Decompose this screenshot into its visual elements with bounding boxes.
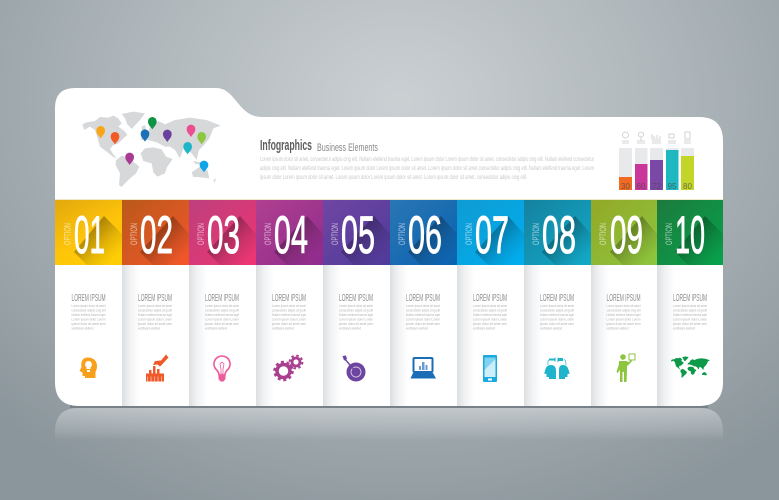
text block 02: Nullam eleifend trauma eget — [138, 312, 173, 317]
text block 09: Lorem ipsum dolor Lorem — [606, 316, 641, 322]
text block 04: Lorem ipsum dolor Lorem — [272, 316, 306, 322]
text block 09: Lorem ipsum dolor sit amet — [606, 303, 641, 308]
text block 01: ipsum dolor sit amet sem — [72, 321, 106, 326]
text block 10: Lorem ipsum dolor Lorem — [673, 316, 707, 322]
text block 08 — [540, 293, 575, 330]
option 09 tile — [591, 200, 657, 265]
text block 09 — [606, 293, 641, 330]
panel folds — [122, 265, 675, 406]
option 01 tile: 01 — [74, 206, 105, 265]
option 03 tile — [189, 200, 256, 265]
text block 05: ipsum dolor sit amet sem — [339, 321, 374, 326]
text block 06: ipsum dolor sit amet sem — [406, 321, 441, 326]
option 06 tile — [390, 200, 457, 265]
bar chart — [619, 132, 694, 191]
text block 05: Lorem ipsum dolor sit amet — [339, 303, 374, 308]
text block 10: consectetur adipis cing elit — [673, 308, 708, 312]
text block 07: consectetur adipis cing elit — [473, 308, 508, 312]
text block 06: Lorem ipsum dolor sit amet — [406, 303, 441, 308]
intro paragraph: ipsum dolor Lorem ipsum dolor sit amet. Lorem ipsum dolor Lorem ipsum dolor sit amet. Lorem ipsum dolor sit amet, consectetur adipis cing elit. — [260, 174, 527, 181]
text block 07: ipsum dolor sit amet sem — [473, 321, 508, 326]
text: LOREM IPSUM — [473, 293, 507, 304]
text block 02 — [138, 293, 173, 330]
ribbon top edge — [55, 199, 723, 200]
icon: light bulb — [214, 356, 230, 382]
text block 03: ipsum dolor sit amet sem — [205, 321, 240, 326]
option 02 tile: OPTION — [129, 223, 140, 245]
text block 07: Lorem ipsum dolor sit amet — [473, 303, 508, 308]
text block 09: Nullam eleifend trauma eget — [606, 312, 641, 317]
option 08 tile — [524, 200, 591, 265]
text block 09: vestibulum eleifend — [606, 326, 628, 330]
option 10 tile: 10 — [675, 206, 705, 265]
icon: green world map — [671, 357, 710, 378]
text block 10: vestibulum eleifend — [673, 326, 695, 330]
text block 02: vestibulum eleifend — [138, 326, 160, 330]
text block 04: Lorem ipsum dolor sit amet — [272, 303, 307, 308]
text block 03: Lorem ipsum dolor Lorem — [205, 316, 239, 322]
option 03 tile: OPTION — [196, 223, 207, 245]
option 01 tile: OPTION — [62, 223, 74, 245]
text block 01: vestibulum eleifend — [72, 326, 94, 330]
intro paragraph — [260, 156, 594, 181]
text block 02: consectetur adipis cing elit — [138, 308, 173, 312]
text block 05: Nullam eleifend trauma eget — [339, 312, 374, 317]
text block 07 — [473, 293, 508, 330]
option 01 tile — [55, 200, 122, 265]
option 02 tile — [122, 200, 189, 265]
text block 09: ipsum dolor sit amet sem — [606, 321, 641, 326]
text block 06: Nullam eleifend trauma eget — [406, 312, 441, 317]
option 08 tile: 08 — [542, 206, 576, 265]
text block 10: Nullam eleifend trauma eget — [673, 312, 708, 317]
folder card — [55, 88, 723, 406]
text block 07: Lorem ipsum dolor Lorem — [473, 316, 507, 322]
text block 06: vestibulum eleifend — [406, 326, 428, 330]
option 04 tile — [256, 200, 323, 265]
text block 04: consectetur adipis cing elit — [272, 308, 307, 312]
text block 09: consectetur adipis cing elit — [606, 308, 641, 312]
text block 04: Nullam eleifend trauma eget — [272, 312, 307, 317]
text: LOREM IPSUM — [540, 293, 574, 304]
map pins — [96, 117, 208, 172]
text block 06: consectetur adipis cing elit — [406, 308, 441, 312]
text block 03: consectetur adipis cing elit — [205, 308, 240, 312]
text: LOREM IPSUM — [406, 293, 440, 304]
option 06 tile: 06 — [408, 206, 442, 265]
text block 08: Nullam eleifend trauma eget — [540, 312, 575, 317]
text block 10: Lorem ipsum dolor sit amet — [673, 303, 708, 308]
text block 01: Lorem ipsum dolor sit amet — [72, 303, 106, 308]
icon: two heads connected — [544, 357, 570, 379]
option 05 tile — [323, 200, 390, 265]
text block 02: Lorem ipsum dolor Lorem — [138, 316, 172, 322]
option 09 tile: 09 — [610, 206, 643, 265]
text: LOREM IPSUM — [138, 293, 172, 304]
text block 07: Nullam eleifend trauma eget — [473, 312, 508, 317]
card reflection — [55, 408, 723, 440]
text block 08: consectetur adipis cing elit — [540, 308, 575, 312]
text block 03: Nullam eleifend trauma eget — [205, 312, 240, 317]
text: LOREM IPSUM — [606, 293, 640, 304]
text: LOREM IPSUM — [72, 293, 106, 304]
text block 05: consectetur adipis cing elit — [339, 308, 374, 312]
icon: person with tablet — [616, 354, 635, 382]
icon: dartboard target — [342, 356, 366, 382]
world map with pins — [82, 112, 221, 187]
text block 08: Lorem ipsum dolor sit amet — [540, 303, 575, 308]
heading: Business Elements — [317, 142, 378, 154]
text: LOREM IPSUM — [205, 293, 239, 304]
text block 08: Lorem ipsum dolor Lorem — [540, 316, 574, 322]
icon: gears — [274, 356, 302, 380]
bar values: 72 — [652, 182, 661, 191]
option 04 tile: 04 — [274, 206, 308, 265]
option 04 tile: OPTION — [263, 223, 274, 245]
bar values: 95 — [668, 182, 677, 191]
option 02 tile: 02 — [140, 206, 173, 265]
icon: hand over bar chart — [146, 354, 168, 382]
text block 03: vestibulum eleifend — [205, 326, 227, 330]
text block 02: ipsum dolor sit amet sem — [138, 321, 173, 326]
icon: head with lightbulb — [80, 358, 97, 378]
icon: smartphone — [483, 355, 497, 382]
text: LOREM IPSUM — [272, 293, 306, 304]
card drop shadow — [70, 404, 708, 408]
text block 01: consectetur adipis cing elit — [72, 308, 106, 312]
text block 03: Lorem ipsum dolor sit amet — [205, 303, 240, 308]
bar fills — [619, 150, 694, 190]
world map — [82, 112, 221, 187]
option 10 tile — [657, 200, 723, 265]
bar values: 80 — [683, 182, 692, 191]
text block 05 — [339, 293, 374, 330]
option 03 tile: 03 — [207, 206, 240, 265]
intro paragraph: Lorem ipsum dolor sit amet, consectetur adipis cing elit. Nullam eleifend trauma eget. Lorem ipsum dolor Lorem ipsum dolor sit amet, consectetur adipis cing elit. Nullam eleifend consectetur — [260, 156, 594, 163]
text block 06 — [406, 293, 441, 330]
text block 08: vestibulum eleifend — [540, 326, 562, 330]
bar values: 30 — [621, 182, 630, 191]
option 10 tile: OPTION — [664, 223, 675, 245]
option 07 tile: OPTION — [464, 223, 475, 245]
text block 01: Lorem ipsum dolor Lorem — [72, 316, 106, 322]
text block 03 — [205, 293, 240, 330]
bar chart icons — [622, 132, 691, 143]
text block 02: Lorem ipsum dolor sit amet — [138, 303, 173, 308]
text: LOREM IPSUM — [339, 293, 373, 304]
option 07 tile — [457, 200, 524, 265]
bar values — [621, 182, 692, 191]
text block 10: ipsum dolor sit amet sem — [673, 321, 708, 326]
icon: laptop with chart — [410, 358, 436, 378]
option 05 tile: OPTION — [330, 223, 341, 245]
bar tracks — [619, 148, 694, 190]
option 06 tile: OPTION — [397, 223, 408, 245]
option 05 tile: 05 — [341, 206, 375, 265]
text block 04: vestibulum eleifend — [272, 326, 294, 330]
text block 05: vestibulum eleifend — [339, 326, 361, 330]
text block 10 — [673, 293, 708, 330]
text block 07: vestibulum eleifend — [473, 326, 495, 330]
intro paragraph: adipis cing elit. Nullam eleifend trauma eget. Lorem ipsum dolor Lorem ipsum dolor sit amet. Lorem ipsum dolor sit amet consectetur adipis cing elit. Nullam eleifend trauma eget. Lorem — [260, 165, 594, 172]
text block 05: Lorem ipsum dolor Lorem — [339, 316, 373, 322]
text block 08: ipsum dolor sit amet sem — [540, 321, 575, 326]
option 08 tile: OPTION — [531, 223, 542, 245]
text block 01: Nullam eleifend trauma eget — [72, 312, 106, 317]
option 07 tile: 07 — [475, 206, 509, 265]
text: LOREM IPSUM — [673, 293, 707, 304]
text block 04 — [272, 293, 307, 330]
text block 06: Lorem ipsum dolor Lorem — [406, 316, 440, 322]
heading: Infographics — [260, 137, 312, 154]
bar values: 60 — [637, 182, 646, 191]
option 09 tile: OPTION — [598, 223, 609, 245]
text block 01 — [72, 293, 106, 330]
text block 04: ipsum dolor sit amet sem — [272, 321, 307, 326]
